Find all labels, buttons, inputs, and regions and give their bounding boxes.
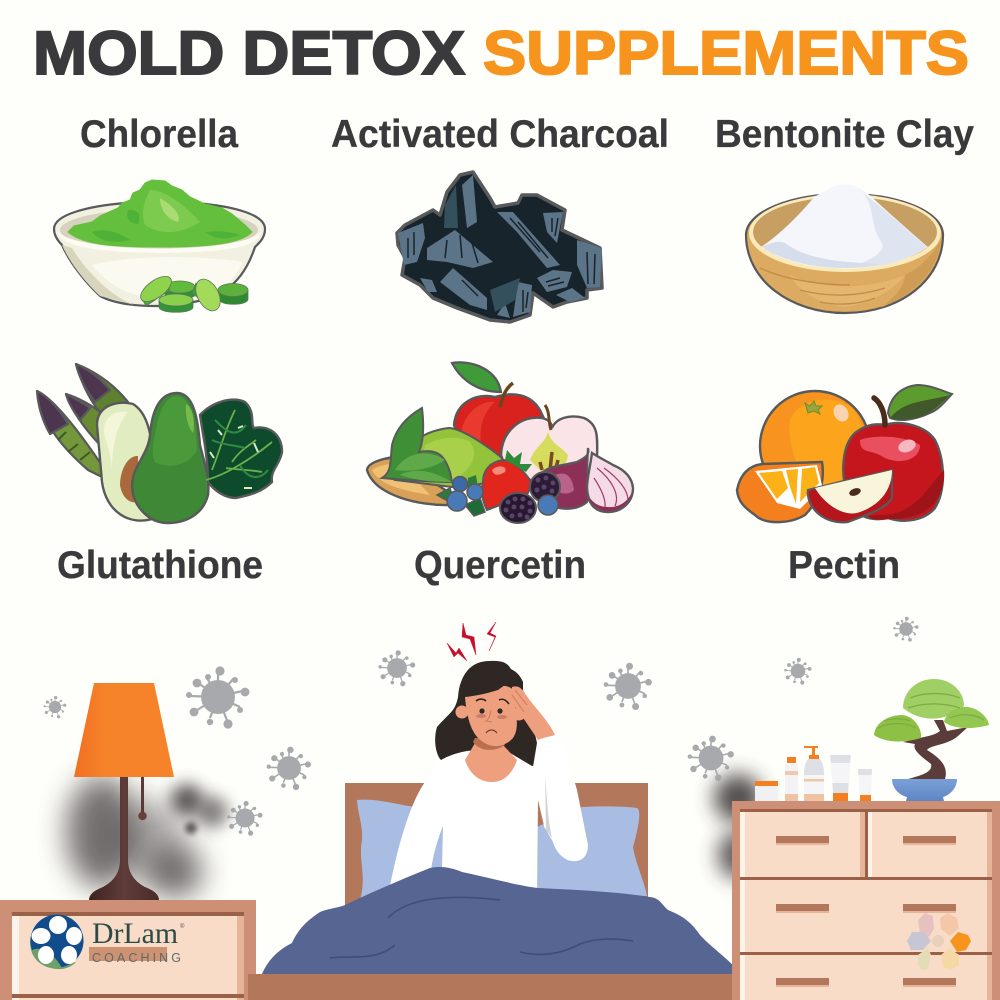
sub: strawberry	[482, 460, 532, 510]
sub: whole avocado	[132, 393, 208, 523]
icon: pectin foods (orange and apple)	[737, 385, 952, 522]
sub: foliage	[874, 715, 921, 741]
icon: quercetin foods (apple, onion, berries, powder)	[367, 362, 633, 523]
sub: hand	[510, 686, 555, 740]
watermark flower	[907, 913, 971, 970]
sub: neck and chest	[465, 743, 517, 782]
label: Bentonite Clay: Bentonite Clay	[715, 113, 974, 156]
sub: hair back	[435, 661, 538, 766]
woman with headache	[390, 622, 588, 895]
title: MOLD DETOX	[33, 19, 465, 87]
logo: DrLam	[92, 917, 178, 950]
sub: apple	[843, 423, 943, 521]
sub: large tube	[830, 755, 851, 801]
sub: orange slice	[737, 462, 823, 522]
sub: cut apple	[501, 416, 597, 480]
label: Glutathione: Glutathione	[57, 544, 263, 587]
lamp	[74, 683, 174, 900]
mold stain beside dresser	[714, 774, 762, 879]
sub: apple leaf	[888, 385, 952, 420]
sub: blackberries	[530, 472, 560, 502]
label: Activated Charcoal: Activated Charcoal	[331, 113, 669, 156]
label: Chlorella: Chlorella	[80, 113, 238, 156]
sub: handles	[776, 836, 956, 985]
icon: charcoal pile	[397, 172, 602, 322]
pillow left	[357, 800, 440, 900]
sub: small tube	[858, 769, 872, 801]
sub: blueberries and leaves	[437, 488, 455, 505]
title: SUPPLEMENTS	[483, 19, 969, 87]
sub: face	[465, 686, 517, 746]
sub: tea leaves	[382, 408, 452, 482]
sub: sliced onion	[587, 453, 633, 512]
sub: lightning bolts	[447, 622, 496, 661]
virus particles	[43, 617, 919, 836]
icon: glutathione foods (asparagus, avocado, leafy greens)	[37, 364, 282, 523]
sub: asparagus spears	[37, 364, 128, 476]
sub: jar	[755, 781, 778, 801]
toiletries on dresser	[755, 746, 872, 801]
sub: leafy greens	[200, 400, 282, 498]
bonsai plant	[874, 679, 989, 801]
label: Quercetin: Quercetin	[414, 544, 586, 587]
sub: apple slice	[808, 470, 892, 522]
title	[33, 19, 969, 87]
nightstand with logo	[0, 900, 256, 1000]
sub: red onion	[539, 448, 590, 509]
logo: ®	[180, 923, 185, 930]
sub: wooden plate	[367, 457, 460, 505]
sub: clay powder	[762, 185, 927, 268]
sub: small bottle	[785, 757, 798, 801]
icon: chlorella bowl with powder and tablets	[54, 180, 265, 315]
logo	[30, 914, 185, 969]
sub: trunk	[903, 720, 968, 779]
label: Pectin: Pectin	[788, 544, 900, 587]
sub: matcha powder mound	[395, 428, 502, 488]
logo: COACHING	[92, 951, 181, 965]
sub: logo emblem	[30, 914, 84, 969]
bed headboard	[345, 783, 648, 913]
sub: pump bottle	[804, 746, 824, 801]
pillow right	[530, 806, 647, 896]
sub: facial features	[476, 699, 509, 733]
mold stains behind lamp	[66, 776, 228, 898]
bed frame	[248, 974, 752, 1000]
sub: orange	[760, 391, 870, 501]
sub: red apple	[454, 394, 547, 470]
sub: tablets	[136, 272, 248, 315]
sub: halved avocado	[97, 403, 155, 521]
icon: bentonite clay bowl	[746, 185, 943, 313]
sub: pot	[892, 779, 957, 801]
sub: torso and sleeve (white sweater)	[390, 735, 588, 895]
sub: hair fringe	[459, 661, 512, 697]
blanket	[262, 867, 742, 975]
dresser	[732, 801, 1000, 1000]
sub: ears	[456, 706, 468, 718]
